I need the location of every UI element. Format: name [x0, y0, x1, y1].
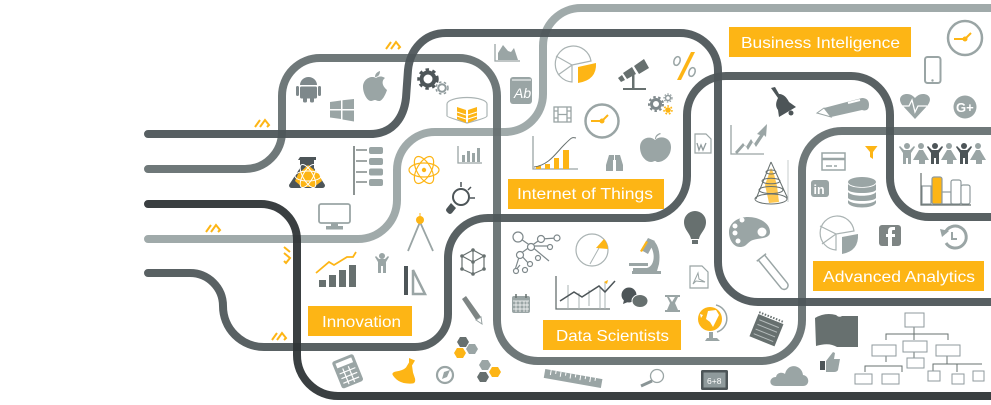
- icon: notepad: [749, 312, 784, 346]
- icon: ruler and set square: [404, 266, 425, 295]
- icon: hourglass: [665, 295, 680, 312]
- icon: people row: [899, 143, 986, 164]
- icon: microscope: [629, 238, 661, 274]
- icon: linkedin: in: [814, 183, 825, 197]
- label: Business Inteligence: Business Inteligence: [741, 35, 900, 52]
- icon: android: [296, 77, 321, 102]
- icon: cone: [755, 160, 788, 204]
- icon: globe: [698, 305, 727, 341]
- icon: history clock: [940, 226, 966, 248]
- label: Internet of Things: [508, 179, 664, 209]
- icon: word document: [695, 134, 711, 153]
- icon: chalkboard: 6+8: [707, 376, 722, 386]
- label: Advanced Analytics: Advanced Analytics: [823, 269, 975, 286]
- icon: percent: [673, 52, 696, 80]
- icon: thumbs up: [820, 352, 840, 372]
- route: mid grey line: [148, 58, 991, 361]
- icon: org chart: [855, 313, 984, 384]
- icon: pdf document: [690, 266, 708, 288]
- icon: pencil: [462, 296, 482, 324]
- icon: binoculars: [606, 155, 623, 171]
- icon: pie chart grey slice: [820, 216, 858, 254]
- icon: line chart: [556, 276, 615, 309]
- icon: funnel: [865, 146, 878, 159]
- route: darkest line: [148, 204, 991, 396]
- label: Data Scientists: Data Scientists: [556, 328, 669, 345]
- icon: facebook: [879, 225, 901, 246]
- icon: drafting compass: [408, 213, 433, 251]
- icon: layered cake: [447, 98, 487, 123]
- icon: hexagon cluster right: [477, 360, 501, 382]
- route: light grey line: [148, 8, 991, 239]
- icon: gears: [418, 70, 448, 94]
- icon: pie outline with hatch: [576, 234, 608, 266]
- icon: open book: [815, 314, 858, 347]
- icon: zigzag chart: [731, 124, 767, 154]
- icon: google plus: [954, 96, 976, 118]
- icon: person arms raised: [375, 253, 389, 273]
- icon: linkedin: [811, 180, 829, 197]
- icon: node tree: [513, 232, 560, 274]
- icon: clock top right: [948, 21, 982, 55]
- icon: growth chart: [316, 252, 356, 287]
- icon: clock centre: [586, 104, 618, 138]
- label: Advanced Analytics: [813, 261, 984, 291]
- icon: list hierarchy: [354, 146, 383, 195]
- icon: compass dial: [437, 367, 453, 383]
- label: Innovation: [308, 306, 412, 336]
- icon: heart pulse: [900, 94, 930, 119]
- route: slate winding line: [148, 76, 991, 347]
- icon: smartphone: [925, 57, 940, 83]
- accent chevrons: [206, 42, 400, 340]
- icon: apple logo: [363, 71, 387, 101]
- icon: chalkboard: [701, 370, 728, 390]
- icon: growth curve with bars: [533, 136, 578, 169]
- icon: calculator: [332, 354, 364, 389]
- icon: pie chart with orange slice: [555, 46, 596, 83]
- icon: bell: [771, 87, 796, 117]
- icon: pen: [817, 98, 869, 117]
- icon: network cube: [460, 248, 486, 276]
- icon: credit card: [822, 153, 845, 170]
- route: slate line: [148, 33, 991, 302]
- label: Business Inteligence: [729, 27, 911, 57]
- icon: typeface book: [510, 77, 532, 104]
- icon: google plus: G+: [956, 100, 974, 115]
- icon: measuring ruler: [544, 369, 602, 388]
- icon: magnifier: [641, 370, 664, 386]
- icon: orange atom flask: [289, 157, 325, 190]
- icon: film strip: [554, 107, 571, 122]
- label: Internet of Things: Internet of Things: [517, 186, 653, 203]
- icon: hexagon cluster left: [454, 337, 478, 358]
- icon: database: [848, 177, 876, 208]
- label: Innovation: Innovation: [322, 314, 401, 331]
- icon: lightbulb: [446, 182, 475, 214]
- icon: area chart: [495, 44, 520, 61]
- icon: bar chart hatched: [921, 173, 971, 205]
- icon: test tube: [757, 254, 791, 292]
- icon: palette: [729, 217, 770, 247]
- icon: atom: [409, 154, 439, 186]
- icon: cloud: [770, 366, 808, 386]
- icon: typeface book: Ab: [513, 85, 531, 101]
- icon: monitor: [319, 204, 350, 230]
- icon: windows: [330, 99, 354, 122]
- icon: orange flask: [392, 358, 415, 384]
- icon: calendar: [512, 294, 530, 313]
- icon: apple fruit: [640, 133, 671, 162]
- icon: telescope: [618, 59, 649, 90]
- label: Data Scientists: [543, 320, 681, 350]
- icon: small bar chart: [458, 146, 482, 163]
- icon: gears with orange cog: [649, 94, 672, 114]
- icon: chat bubbles: [622, 288, 648, 308]
- icon: dark lightbulb: [684, 211, 706, 244]
